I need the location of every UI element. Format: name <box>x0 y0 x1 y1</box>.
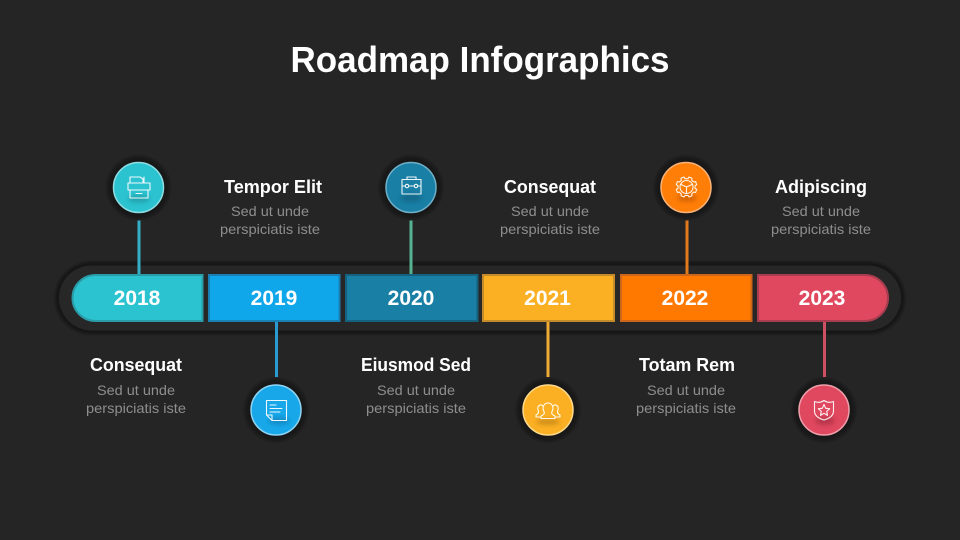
text block: Totam Rem: perspiciatis iste <box>636 400 736 416</box>
text block: Tempor Elit <box>220 177 322 237</box>
text block: Consequat (bottom): perspiciatis iste <box>86 400 186 416</box>
connector: 2020 <box>410 219 412 275</box>
timeline track <box>57 264 903 332</box>
text block: Consequat (top): Sed ut unde <box>511 203 589 219</box>
text block: Consequat (bottom) <box>86 355 186 416</box>
milestone icon: gear <box>653 154 719 220</box>
text block: Eiusmod Sed: perspiciatis iste <box>366 400 466 416</box>
connector: 2021 <box>546 321 550 379</box>
text block: Adipiscing <box>771 177 871 237</box>
segment: 2023: 2023 <box>799 287 845 310</box>
segment: 2019: 2019 <box>251 287 297 310</box>
text block: Consequat (top): Consequat <box>504 177 596 197</box>
segment: 2022 <box>621 275 752 321</box>
connector: 2018 <box>138 219 140 275</box>
milestone icon: team <box>515 377 581 443</box>
text block: Totam Rem: Totam Rem <box>639 355 735 375</box>
text block: Adipiscing: Sed ut unde <box>782 203 860 219</box>
milestone icon: shield star <box>791 377 857 443</box>
connector: 2019 <box>275 321 278 379</box>
segment: 2020 <box>346 275 478 321</box>
milestone icon: briefcase <box>378 154 444 220</box>
text block: Eiusmod Sed: Eiusmod Sed <box>361 355 471 375</box>
text block: Adipiscing: perspiciatis iste <box>771 221 871 237</box>
segment: 2018: 2018 <box>114 287 161 310</box>
text block: Tempor Elit: perspiciatis iste <box>220 221 320 237</box>
segment: 2023 <box>758 275 888 321</box>
text block: Eiusmod Sed <box>361 355 471 416</box>
text block: Tempor Elit: Sed ut unde <box>231 203 309 219</box>
segment: 2021: 2021 <box>524 287 571 310</box>
title: Roadmap Infographics <box>290 39 670 80</box>
segment: 2018 <box>72 275 202 321</box>
segment: 2020: 2020 <box>388 287 434 310</box>
milestone icon: sticky note <box>243 377 309 443</box>
text block: Consequat (top): perspiciatis iste <box>500 221 600 237</box>
text block: Consequat (bottom): Consequat <box>90 355 182 375</box>
text block: Totam Rem <box>636 355 736 416</box>
text block: Tempor Elit: Tempor Elit <box>224 177 322 197</box>
segment: 2022: 2022 <box>662 287 708 310</box>
segment: 2021 <box>483 275 614 321</box>
text block: Consequat (top) <box>500 177 600 237</box>
text block: Adipiscing: Adipiscing <box>775 177 867 197</box>
connector: 2023 <box>823 321 826 379</box>
connector: 2022 <box>686 219 688 275</box>
text block: Consequat (bottom): Sed ut unde <box>97 382 175 398</box>
text block: Totam Rem: Sed ut unde <box>647 382 725 398</box>
text block: Eiusmod Sed: Sed ut unde <box>377 382 455 398</box>
segment: 2019 <box>209 275 340 321</box>
milestone icon: archive box <box>106 154 172 220</box>
